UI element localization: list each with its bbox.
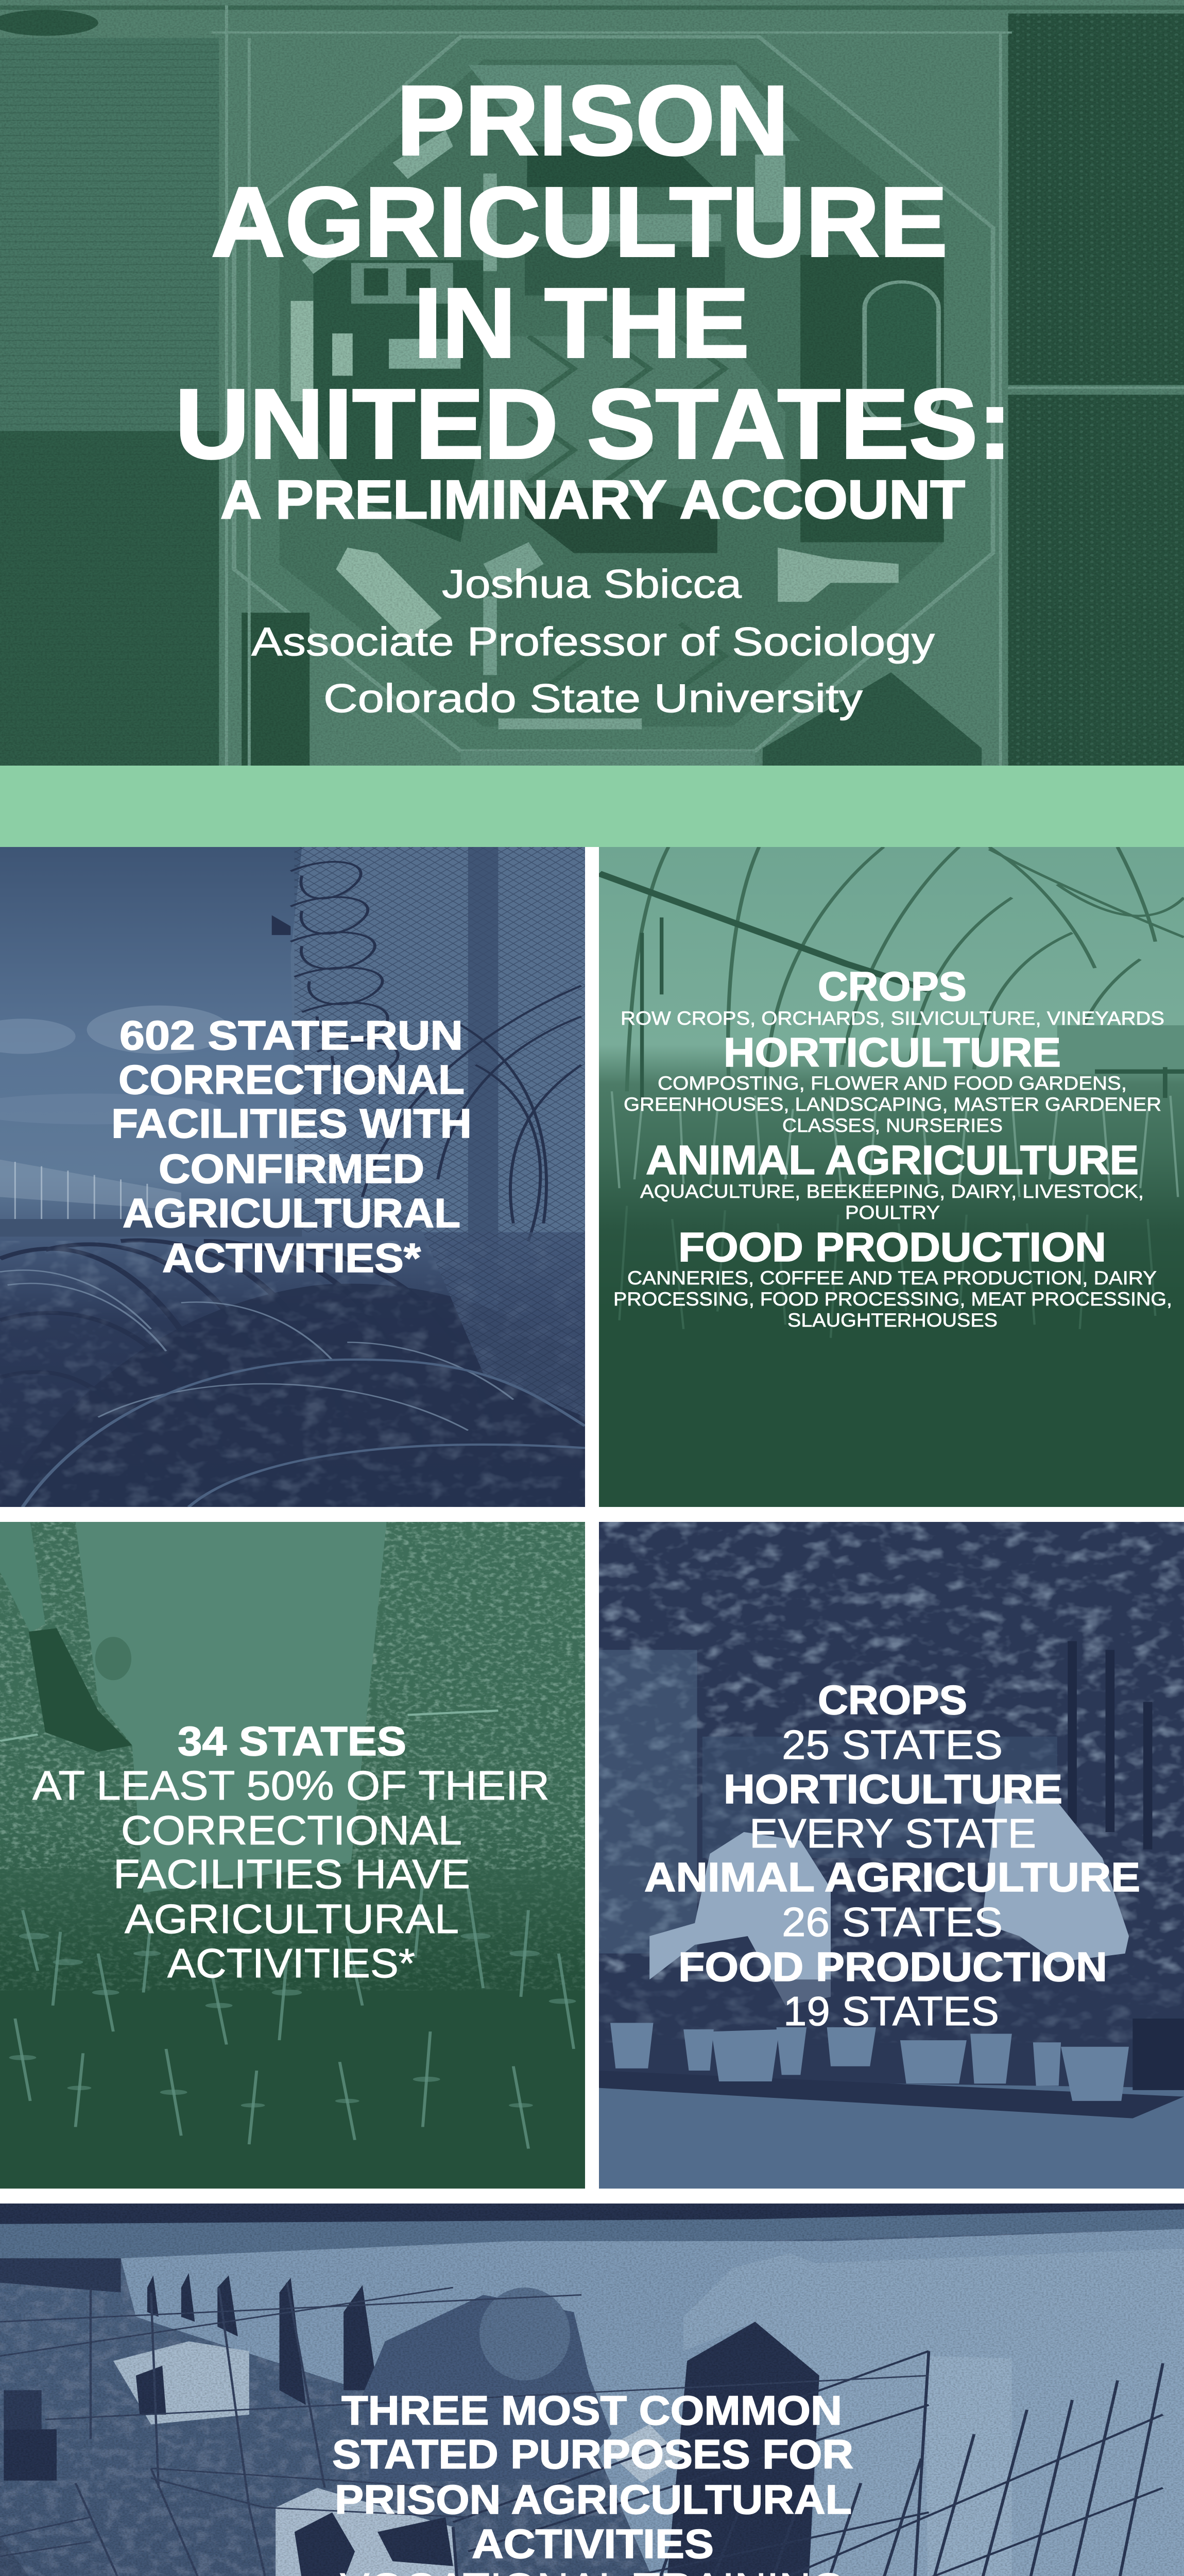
food production detail: PROCESSING, FOOD PROCESSING, MEAT PROCESSING, [613,1289,1172,1310]
panel: stated purposes [0,2204,1184,2576]
category state counts: ANIMAL AGRICULTURE [644,1854,1140,1900]
category list [613,963,1172,1331]
author credit: Colorado State University [323,675,863,721]
photo: legs walking through field [0,1522,585,2189]
34 states statement: ACTIVITIES* [167,1940,415,1986]
34 states statement: AT LEAST 50% OF THEIR [32,1762,550,1808]
title: AGRICULTURE [211,166,948,277]
heading: food production: FOOD PRODUCTION [678,1224,1106,1270]
author credit [251,561,935,721]
animal agriculture detail [640,1181,1144,1223]
34 states statement: CORRECTIONAL [121,1807,462,1853]
facilities statement: FACILITIES WITH [111,1100,472,1146]
34 states statement: FACILITIES HAVE [113,1851,470,1897]
author credit: Associate Professor of Sociology [251,619,935,664]
photo: greenhouse interior [599,847,1184,1507]
horticulture detail: CLASSES, NURSERIES [782,1115,1003,1136]
category state counts [644,1677,1140,2034]
horticulture detail: GREENHOUSES, LANDSCAPING, MASTER GARDENER [624,1094,1161,1115]
category state counts: FOOD PRODUCTION [678,1944,1107,1990]
panel: facilities count [0,847,585,1507]
title: UNITED STATES: [175,368,1012,479]
category state counts: CROPS [818,1677,967,1723]
panel: 34 states statistic [0,1522,585,2189]
panel: hero aerial photo and title [0,0,1184,766]
purposes statement: STATED PURPOSES FOR [332,2431,853,2477]
purposes statement [332,2387,853,2576]
horticulture detail: COMPOSTING, FLOWER AND FOOD GARDENS, [658,1073,1127,1094]
heading: horticulture: HORTICULTURE [724,1029,1061,1075]
title: PRISON [397,65,789,176]
facilities statement: CONFIRMED [159,1146,424,1192]
title [175,65,1012,479]
facilities statement: AGRICULTURAL [123,1190,460,1236]
34 states statement: 34 STATES [178,1718,406,1764]
panel: states per category [599,1522,1184,2189]
facilities statement [111,1012,472,1281]
purposes statement: ACTIVITIES [472,2521,714,2567]
category state counts: HORTICULTURE [724,1766,1062,1812]
food production detail [613,1267,1172,1331]
photo: aerial view of prison [0,0,1184,766]
heading: animal agriculture: ANIMAL AGRICULTURE [646,1137,1139,1183]
facilities statement: CORRECTIONAL [118,1057,465,1103]
photo: razor wire fence [0,847,585,1507]
category state counts: EVERY STATE [749,1810,1036,1856]
author credit: Joshua Sbicca [442,561,742,606]
purposes statement: THREE MOST COMMON [341,2387,842,2433]
34 states statement [32,1718,550,1986]
facilities statement: 602 STATE-RUN [119,1012,463,1058]
category state counts: 25 STATES [782,1722,1003,1768]
category state counts: 19 STATES [783,1988,999,2034]
heading: crops: CROPS [818,963,967,1009]
horticulture detail [624,1073,1161,1136]
photo: calf hutches and worker feeding calf [0,2204,1184,2576]
food production detail: CANNERIES, COFFEE AND TEA PRODUCTION, DAIRY [627,1267,1157,1289]
category state counts: 26 STATES [782,1899,1003,1945]
band: green divider [0,766,1184,847]
facilities statement: ACTIVITIES* [162,1235,421,1281]
panel: activity categories [599,847,1184,1507]
crops detail: ROW CROPS, ORCHARDS, SILVICULTURE, VINEYARDS [621,1008,1164,1029]
photo: workers tending potted plants [599,1522,1184,2189]
food production detail: SLAUGHTERHOUSES [787,1310,998,1331]
34 states statement: AGRICULTURAL [125,1896,459,1942]
title: IN THE [414,267,749,378]
subtitle: A PRELIMINARY ACCOUNT [220,469,965,530]
animal agriculture detail: AQUACULTURE, BEEKEEPING, DAIRY, LIVESTOCK, [640,1181,1144,1202]
purposes statement: PRISON AGRICULTURAL [335,2477,852,2522]
animal agriculture detail: POULTRY [845,1202,940,1223]
